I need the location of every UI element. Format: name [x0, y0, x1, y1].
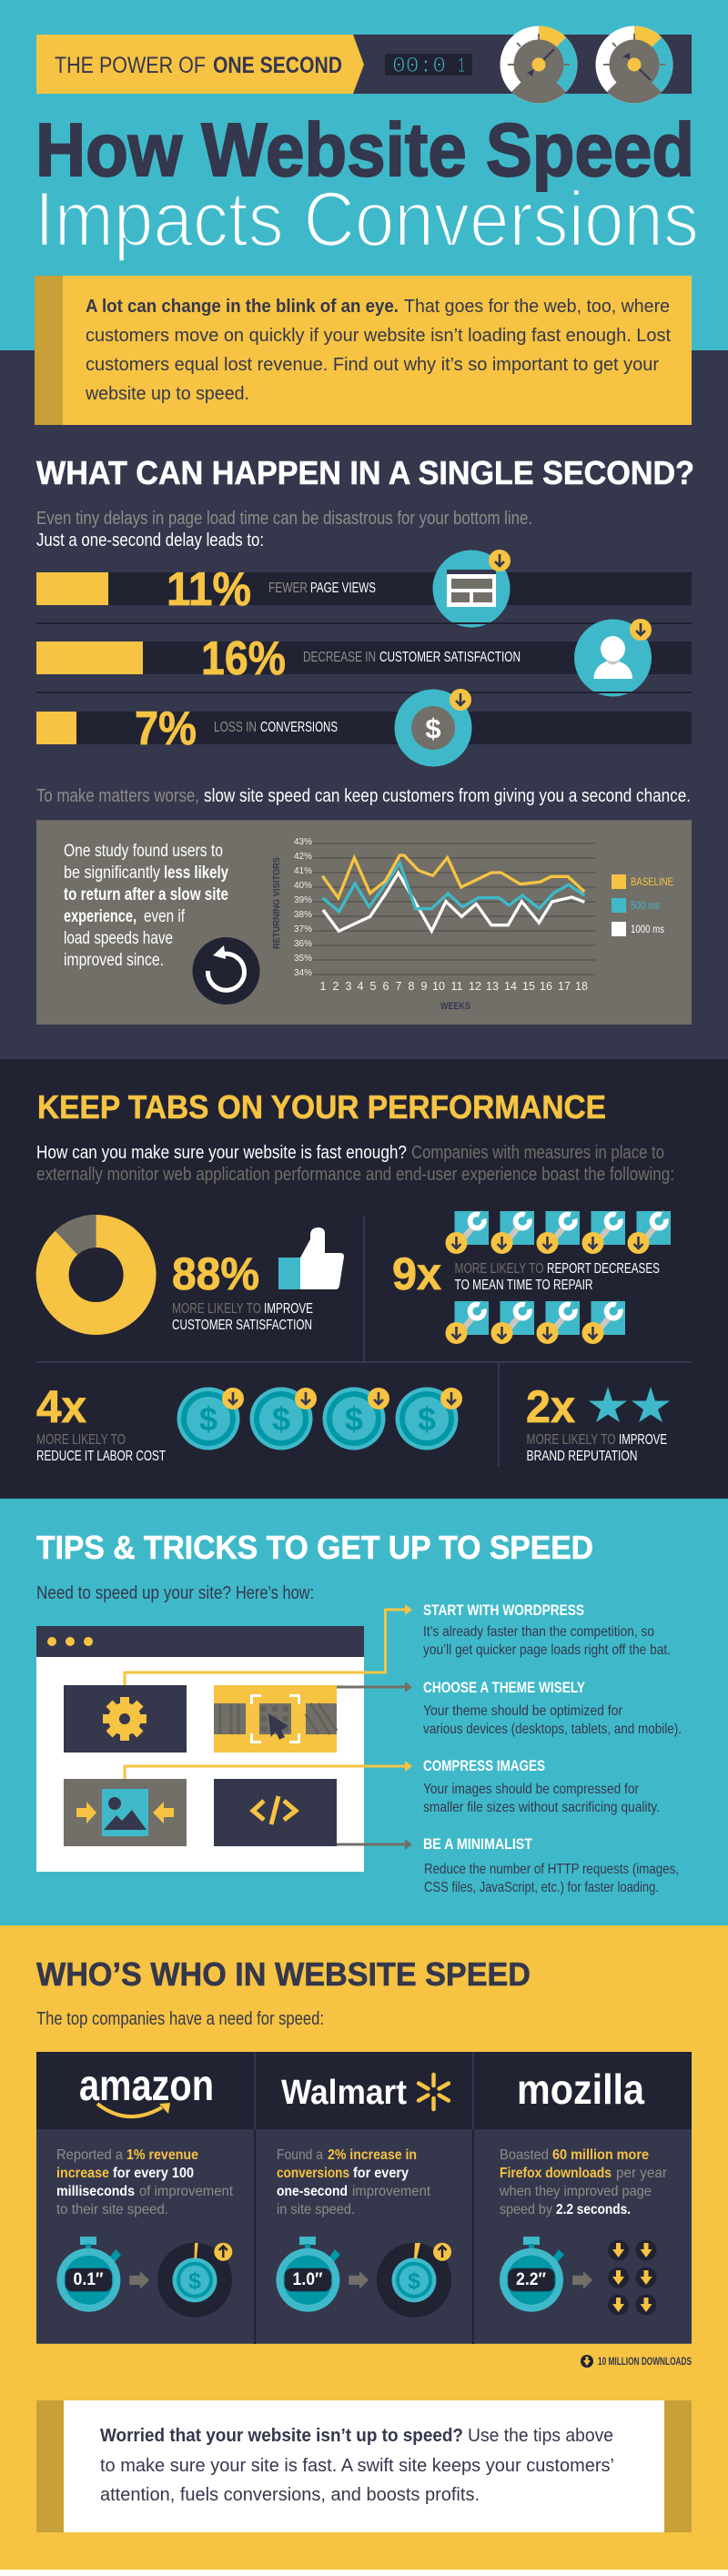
dividers — [36, 1216, 692, 1466]
header banner: ONE SECOND — [213, 53, 342, 78]
section heading: single second: WHAT CAN HAPPEN IN A SINGLE SECOND? — [36, 454, 694, 491]
study text: improved since. — [64, 951, 164, 970]
stat: 9x mean time to repair — [392, 1210, 672, 1344]
y axis grid and labels: 43% — [294, 837, 312, 847]
icon: revenue up: $ — [188, 2268, 201, 2294]
walmart text: improvement — [352, 2184, 431, 2199]
icon: coin 4: $ — [418, 1400, 436, 1438]
icon: coin 2: $ — [272, 1400, 290, 1438]
week labels: 8 — [409, 980, 415, 993]
panel: gear — [64, 1685, 187, 1753]
week labels: 13 — [486, 980, 499, 993]
stat: 2x brand reputation: IMPROVE — [619, 1432, 667, 1448]
icon: stopwatch 0.1: 0.1″ — [73, 2270, 104, 2289]
icon: coin 4 — [395, 1387, 462, 1450]
walmart text: Found a — [277, 2147, 323, 2163]
tip: choose a theme wisely: CHOOSE A THEME WISELY — [423, 1679, 586, 1696]
mozilla text — [499, 2147, 668, 2217]
stat: 2x brand reputation: 2x — [526, 1381, 575, 1432]
tip: start with wordpress: It’s already faster than the competition, so — [423, 1624, 654, 1640]
stat: 9x mean time to repair: 9x — [392, 1248, 441, 1299]
icon: coin 1 — [177, 1387, 244, 1450]
stat: 2x brand reputation — [526, 1381, 670, 1464]
stat bar: 16%: DECREASE IN — [303, 650, 376, 665]
y axis grid and labels: 42% — [294, 852, 312, 862]
axis titles: WEEKS — [440, 1001, 470, 1012]
amazon text: of improvement — [139, 2184, 234, 2199]
logo: mozilla: mozilla — [517, 2066, 644, 2113]
stat: 9x mean time to repair: TO MEAN TIME TO REPAIR — [455, 1278, 593, 1293]
mozilla text: 60 million more — [552, 2147, 649, 2163]
closing callout: Use the tips above — [468, 2426, 613, 2446]
week labels: 7 — [396, 980, 402, 993]
week labels: 16 — [540, 980, 552, 993]
week labels: 18 — [575, 980, 588, 993]
icon: coin 3 — [322, 1387, 389, 1450]
week labels: 1 — [320, 980, 327, 993]
transition sentence: To make matters worse, — [36, 786, 199, 806]
gauge 1 — [500, 25, 577, 104]
performance intro text: Companies with measures in place to — [411, 1143, 664, 1163]
section heading: tips: TIPS & TRICKS TO GET UP TO SPEED — [36, 1529, 593, 1566]
digital timer: 1 — [458, 55, 465, 79]
logo: amazon: amazon — [79, 2062, 214, 2110]
amazon text: to their site speed. — [56, 2202, 168, 2217]
arrow: theme connector — [337, 1682, 412, 1692]
study text: less likely — [164, 864, 228, 883]
intro callout: customers equal lost revenue. Find out why it’s so important to get your — [86, 355, 659, 375]
gauge 2 — [595, 25, 673, 104]
stat bar: 11%: FEWER — [268, 581, 308, 596]
icon: coin 1: $ — [199, 1400, 217, 1438]
tip: compress images: smaller file sizes without sacrificing quality. — [423, 1800, 660, 1815]
stat: 88% customer satisfaction — [53, 1215, 344, 1333]
performance intro text: How can you make sure your website is fast enough? — [36, 1143, 407, 1163]
stat: 2x brand reputation: MORE LIKELY TO — [526, 1432, 615, 1448]
performance intro text — [36, 1143, 674, 1185]
column: amazon — [56, 2062, 234, 2318]
title — [35, 107, 699, 263]
panel: compress image — [64, 1779, 187, 1846]
y axis grid and labels: 38% — [294, 910, 312, 920]
section heading: performance: KEEP TABS ON YOUR PERFORMANCE — [37, 1088, 606, 1126]
tip: compress images — [423, 1757, 660, 1815]
icon: stopwatch 2.2: 2.2″ — [516, 2270, 546, 2289]
arrow — [349, 2271, 369, 2289]
tip: be a minimalist: Reduce the number of HTTP requests (images, — [424, 1862, 679, 1877]
walmart text: one-second — [277, 2184, 348, 2199]
stat: 4x labor cost — [36, 1381, 462, 1464]
stat: 88% customer satisfaction: MORE LIKELY TO — [172, 1301, 261, 1317]
intro callout: website up to speed. — [85, 384, 249, 404]
icon: stopwatch 2.2 — [500, 2237, 564, 2312]
y axis grid and labels: 35% — [294, 954, 312, 964]
arrow — [129, 2271, 149, 2289]
stat: 4x labor cost: MORE LIKELY TO — [36, 1432, 126, 1448]
amazon text: milliseconds — [56, 2184, 135, 2199]
week labels: 17 — [558, 980, 571, 993]
icon: dollar: $ — [425, 712, 441, 744]
y axis grid and labels: 40% — [294, 881, 312, 891]
digital timer: 00:0 — [392, 55, 446, 79]
week labels: 14 — [504, 980, 517, 993]
week labels: 10 — [432, 980, 445, 993]
week labels: 15 — [522, 980, 535, 993]
stat bar: 16%: 16% — [201, 632, 286, 685]
icon: coin 3: $ — [345, 1400, 363, 1438]
study text: even if — [144, 907, 186, 926]
walmart text — [277, 2147, 431, 2217]
arrow: wordpress connector — [125, 1604, 412, 1685]
icon: thumbs up — [278, 1227, 344, 1289]
walmart text: 2% increase in — [328, 2147, 417, 2163]
mozilla text: 2.2 seconds. — [556, 2202, 631, 2217]
y axis grid and labels — [294, 837, 595, 978]
icon: revenue up — [157, 2243, 232, 2318]
icon: conversions up — [377, 2243, 451, 2318]
y axis grid and labels: 37% — [294, 924, 312, 934]
week labels: 3 — [346, 980, 352, 993]
stat: 4x labor cost: REDUCE IT LABOR COST — [36, 1449, 166, 1464]
legend — [612, 874, 673, 936]
amazon text: 1% revenue — [126, 2147, 198, 2163]
arrow: minimalist connector — [337, 1839, 412, 1850]
tip: choose a theme wisely: Your theme should be optimized for — [423, 1703, 623, 1719]
mozilla text: per year — [616, 2166, 668, 2181]
stat bar: 7% — [36, 689, 692, 766]
tip: be a minimalist: CSS files, JavaScript, etc.) for faster loading. — [424, 1880, 659, 1895]
stat: 88% customer satisfaction: 88% — [172, 1248, 259, 1299]
closing callout: to make sure your site is fast. A swift site keeps your customers’ — [100, 2456, 614, 2476]
icon: dollar — [395, 689, 471, 766]
closing callout: Worried that your website isn’t up to speed? — [100, 2426, 463, 2446]
tip: compress images: COMPRESS IMAGES — [423, 1757, 545, 1774]
icons: download arrows — [608, 2240, 657, 2315]
icon: stopwatch 1.0 — [276, 2237, 340, 2312]
mozilla text: when they improved page — [499, 2184, 652, 2199]
study text: to return after a slow site — [64, 885, 228, 904]
intro callout — [35, 276, 692, 425]
panel: company table — [36, 2052, 692, 2344]
legend: 500 ms — [631, 899, 660, 912]
section intro text: Even tiny delays in page load time can be disastrous for your bottom line. — [36, 509, 532, 529]
legend: BASELINE — [631, 875, 673, 888]
legend: 10 million downloads: 10 MILLION DOWNLOADS — [598, 2357, 692, 2368]
closing callout: attention, fuels conversions, and boosts profits. — [100, 2485, 480, 2505]
study text: load speeds have — [64, 929, 173, 948]
arrow: images connector — [125, 1761, 412, 1779]
stat bar: 7%: LOSS IN — [214, 720, 257, 735]
stat bar: 7%: 7% — [135, 702, 197, 755]
section heading: who's who: WHO’S WHO IN WEBSITE SPEED — [36, 1955, 531, 1993]
section intro text — [36, 509, 532, 551]
donut chart — [53, 1215, 140, 1318]
tip: be a minimalist: BE A MINIMALIST — [423, 1835, 533, 1853]
stat: 4x labor cost: 4x — [36, 1381, 86, 1432]
amazon text: increase — [56, 2166, 109, 2181]
icons: wrenches — [446, 1210, 672, 1344]
tips intro text: Here’s how: — [236, 1583, 314, 1603]
column: walmart — [276, 2074, 451, 2318]
axis titles: RETURNING VISITORS — [272, 857, 282, 949]
panel: code — [214, 1779, 337, 1846]
browser window illustration — [36, 1626, 364, 1872]
legend: 1000 ms — [631, 923, 664, 935]
walmart text: conversions — [277, 2166, 349, 2181]
stat bar: 11%: 11% — [167, 563, 251, 616]
mozilla text: speed by — [500, 2202, 552, 2217]
tip: be a minimalist — [423, 1835, 679, 1895]
stat: 9x mean time to repair: MORE LIKELY TO — [455, 1261, 544, 1277]
icon: stopwatch 0.1 — [56, 2237, 121, 2312]
week labels: 11 — [451, 980, 463, 993]
mozilla text: Boasted — [500, 2147, 549, 2163]
stat: 9x mean time to repair: REPORT DECREASES — [547, 1261, 660, 1277]
closing callout — [36, 2400, 692, 2532]
amazon text — [56, 2147, 234, 2217]
arrow — [572, 2271, 592, 2289]
column: mozilla — [499, 2066, 668, 2315]
stat: 88% customer satisfaction: CUSTOMER SATISFACTION — [172, 1318, 312, 1333]
stat bar: 11%: PAGE VIEWS — [310, 581, 376, 596]
walmart text: for every — [353, 2166, 409, 2181]
intro callout: customers move on quickly if your website isn’t loading fast enough. Lost — [86, 326, 671, 346]
study text — [64, 842, 228, 970]
icon: replay — [193, 937, 260, 1005]
intro callout: A lot can change in the blink of an eye. — [86, 297, 399, 317]
tip: choose a theme wisely: various devices (desktops, tablets, and mobile). — [423, 1722, 682, 1737]
panel: theme carousel — [214, 1685, 337, 1753]
icons: stars — [589, 1387, 670, 1422]
tip: start with wordpress: you’ll get quicker page loads right off the bat. — [423, 1642, 671, 1658]
stat bar: 7%: CONVERSIONS — [260, 720, 338, 735]
legend: 10 million downloads — [581, 2355, 692, 2368]
amazon text: Reported a — [56, 2147, 123, 2163]
icon: stopwatch 1.0: 1.0″ — [293, 2270, 322, 2289]
week labels: 12 — [469, 980, 481, 993]
header banner: THE POWER OF — [55, 53, 206, 78]
icon: conversions up: $ — [408, 2268, 420, 2294]
y axis grid and labels: 36% — [294, 939, 312, 949]
y axis grid and labels: 41% — [294, 866, 312, 876]
stat: 88% customer satisfaction: IMPROVE — [264, 1301, 313, 1317]
week labels: 6 — [383, 980, 389, 993]
amazon text: for every 100 — [113, 2166, 194, 2181]
week labels: 9 — [421, 980, 428, 993]
logo: walmart: Walmart — [281, 2074, 407, 2112]
stat bar: 16%: CUSTOMER SATISFACTION — [379, 650, 521, 665]
tip: start with wordpress — [423, 1601, 671, 1658]
week labels — [320, 980, 588, 993]
data lines — [322, 855, 584, 931]
tips intro text: Need to speed up your site? — [36, 1583, 231, 1603]
stat bar: 16% — [36, 619, 692, 697]
week labels: 4 — [358, 980, 364, 993]
tip: choose a theme wisely — [423, 1679, 682, 1737]
icon: coin 2 — [249, 1387, 317, 1450]
tip: compress images: Your images should be compressed for — [423, 1782, 640, 1797]
intro callout: That goes for the web, too, where — [404, 297, 670, 317]
week labels: 2 — [333, 980, 339, 993]
y axis grid and labels: 34% — [294, 968, 312, 978]
who's who intro text: The top companies have a need for speed: — [36, 2009, 324, 2029]
stat bar: 11% — [36, 550, 692, 628]
stat: 2x brand reputation: BRAND REPUTATION — [526, 1449, 637, 1464]
study text: experience, — [64, 907, 136, 926]
week labels: 5 — [370, 980, 377, 993]
icon: customer — [574, 619, 652, 697]
mozilla text: Firefox downloads — [500, 2166, 612, 2181]
icon: page layout — [433, 550, 511, 628]
digital timer — [385, 54, 472, 79]
axis titles — [272, 857, 470, 1012]
tip: start with wordpress: START WITH WORDPRESS — [423, 1601, 584, 1619]
y axis grid and labels: 39% — [294, 895, 312, 905]
panel: returning visitors study — [36, 820, 692, 1025]
study text: be significantly — [64, 864, 160, 883]
section intro text: Just a one-second delay leads to: — [36, 530, 264, 551]
line chart — [272, 837, 673, 1012]
header banner — [36, 25, 692, 104]
study text: One study found users to — [64, 842, 223, 861]
walmart text: in site speed. — [277, 2202, 355, 2217]
